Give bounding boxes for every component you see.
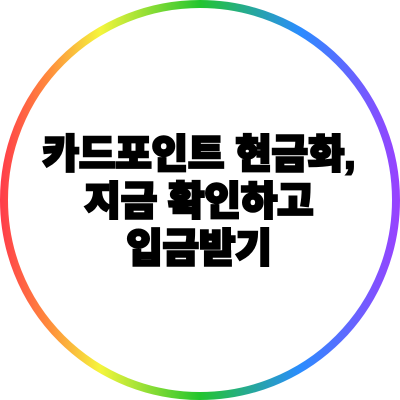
- title line 2: 지금 확인하고: [84, 180, 314, 224]
- title line 1: 카드포인트 현금화,: [43, 133, 355, 177]
- title line 3: 입금받기: [126, 227, 272, 271]
- title: [42, 132, 355, 271]
